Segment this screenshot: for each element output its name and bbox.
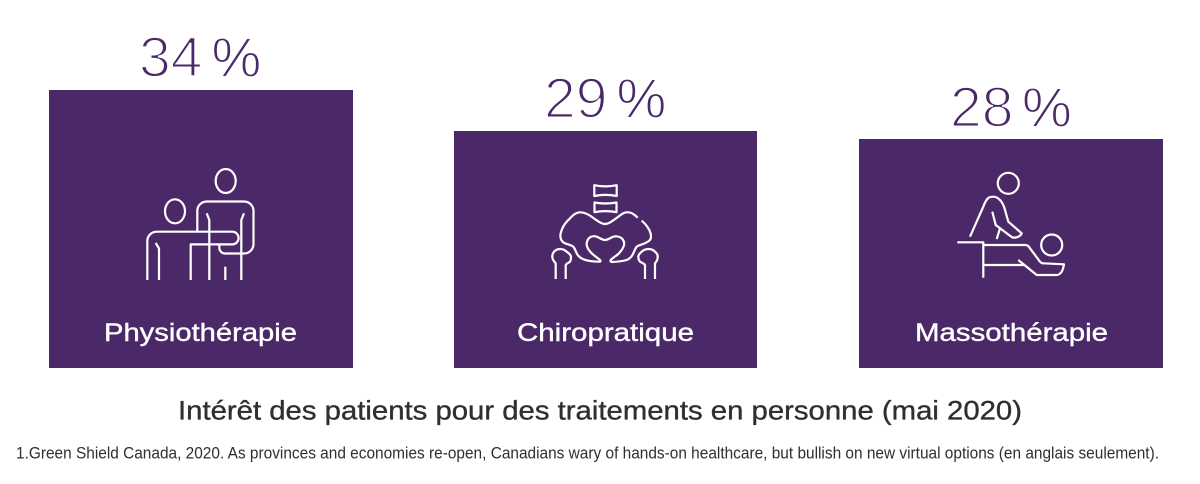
purple panel background	[454, 131, 757, 368]
label: Chiropratique: Chiropratique	[517, 319, 694, 347]
percentage: 29 %: 29	[544, 66, 607, 130]
icon: pelvis and spine	[552, 185, 658, 279]
icon: therapist and patient	[147, 169, 254, 280]
percentage: 29 %: %	[616, 66, 666, 130]
panel: massage therapy	[859, 76, 1163, 368]
percentage: 34 %: 34	[139, 26, 202, 90]
chart caption: Intérêt des patients pour des traitements en personne (mai 2020)	[178, 396, 1022, 426]
panel: physiotherapy	[49, 26, 353, 368]
label: Massothérapie: Massothérapie	[915, 319, 1108, 347]
purple panel background	[859, 139, 1163, 368]
percentage: 28 %: %	[1022, 76, 1072, 138]
percentage: 28 %: 28	[950, 76, 1013, 140]
purple panel background	[49, 90, 353, 368]
percentage: 34 %: %	[212, 26, 261, 88]
panel: chiropractic	[454, 66, 757, 368]
icon: massage therapist and client	[957, 173, 1064, 278]
label: Physiothérapie: Physiothérapie	[104, 319, 297, 347]
